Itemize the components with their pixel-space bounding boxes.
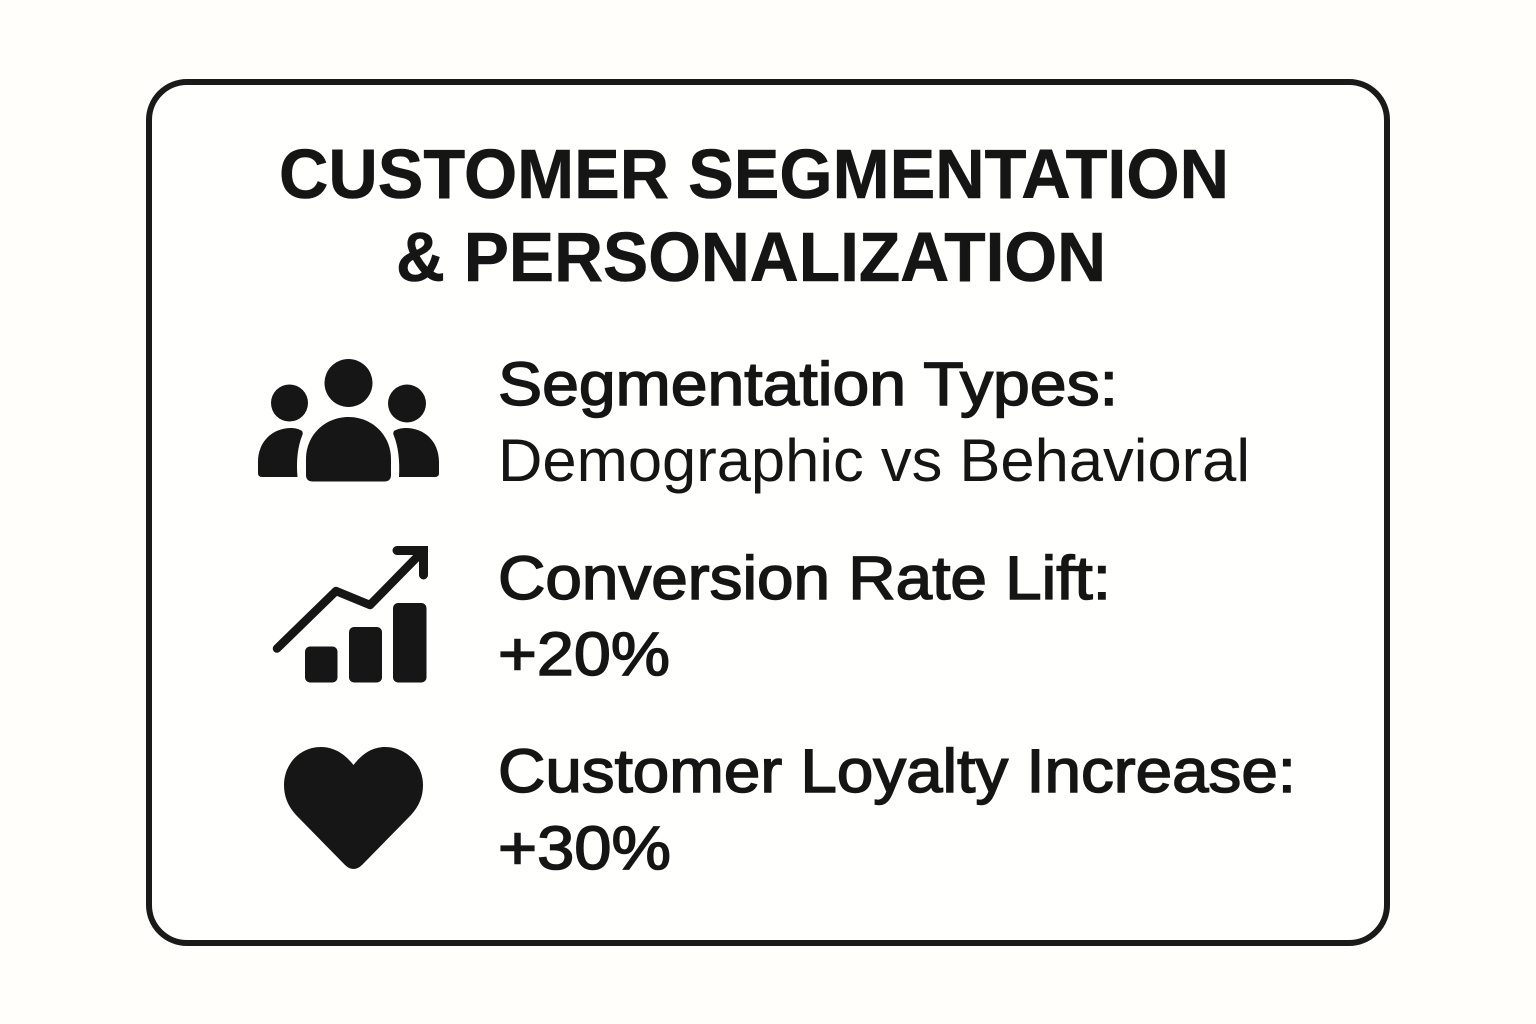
panel: card xyxy=(149,82,1387,943)
icon: people xyxy=(258,359,439,482)
text: segmentation types: Demographic vs Behavioral xyxy=(498,427,1250,494)
title xyxy=(279,135,1229,296)
text: conversion rate lift xyxy=(498,544,1111,688)
icon: heart xyxy=(284,747,423,869)
text: customer loyalty increase xyxy=(498,737,1296,882)
icon: growth chart xyxy=(277,550,426,682)
text: segmentation types: Segmentation Types: xyxy=(498,350,1118,418)
title: CUSTOMER SEGMENTATION xyxy=(279,135,1229,213)
text: segmentation types xyxy=(498,350,1250,494)
text: customer loyalty increase: +30% xyxy=(498,814,671,882)
text: customer loyalty increase: Customer Loyalty Increase: xyxy=(498,737,1296,805)
text: conversion rate lift: +20% xyxy=(498,620,670,688)
text: conversion rate lift: Conversion Rate Lift: xyxy=(498,544,1111,612)
title: & PERSONALIZATION xyxy=(396,218,1106,296)
